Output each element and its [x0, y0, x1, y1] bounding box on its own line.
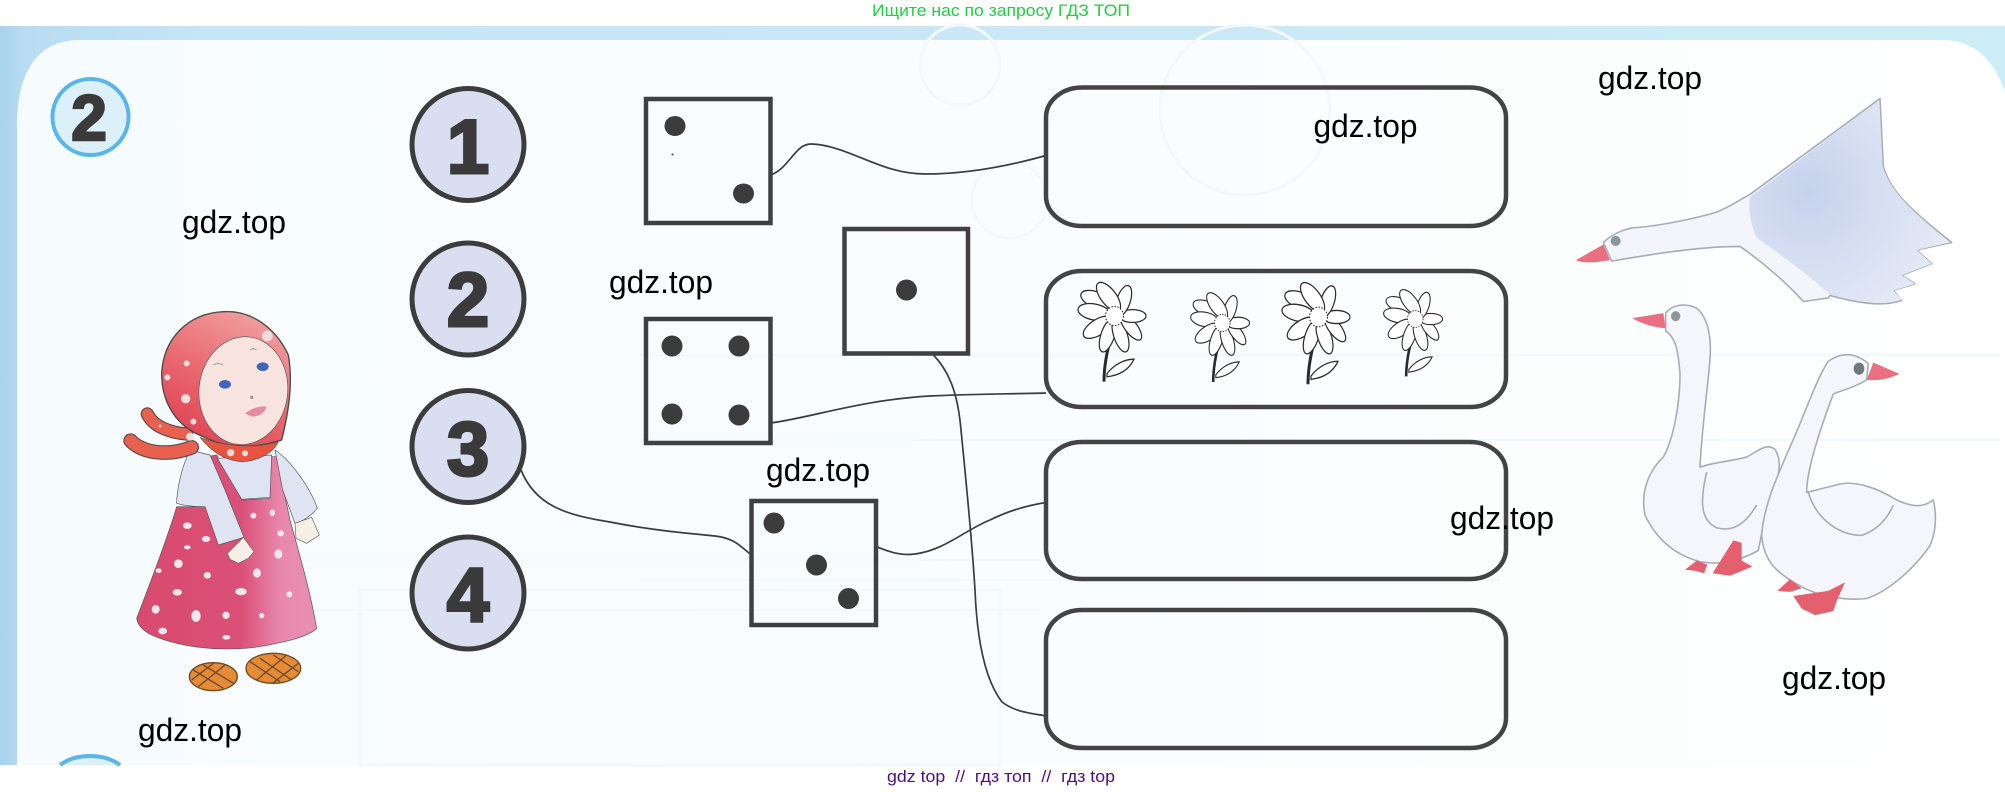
number circle 4: 4 — [447, 553, 489, 638]
number circle 2 — [412, 243, 524, 355]
number circle 1: 1 — [447, 105, 489, 190]
header link text: Ищите нас по запросу ГДЗ ТОП — [872, 1, 1130, 20]
scarf knot band — [200, 437, 278, 462]
badge: exercise number 2: 2 — [71, 82, 107, 154]
watermark text: gdz.top — [1598, 60, 1702, 96]
answer box 1 — [1046, 88, 1506, 226]
blouse and sleeves — [177, 450, 317, 545]
connector: die three to third box — [876, 502, 1046, 555]
standing goose — [1632, 305, 1779, 576]
connector: die one to fourth box — [933, 354, 1046, 716]
shoes — [189, 653, 301, 691]
scarf dots — [159, 331, 273, 456]
headscarf — [162, 312, 290, 446]
hands — [227, 517, 319, 563]
watermark text: gdz.top — [1314, 108, 1418, 144]
dress — [137, 455, 317, 649]
flower 1 — [1077, 278, 1146, 382]
connector: circle three to die three — [521, 470, 752, 555]
illustration: geese — [1576, 98, 1952, 615]
eyes, nose, mouth — [213, 349, 269, 417]
badge: next exercise, cut off — [60, 756, 120, 765]
watermark text: gdz.top — [766, 452, 870, 488]
number circle 4 — [412, 537, 524, 649]
badge: exercise number 2 — [52, 79, 128, 155]
sitting goose — [1762, 355, 1936, 615]
number circle 3: 3 — [447, 407, 489, 492]
number circle 1 — [412, 88, 524, 200]
flower 2 — [1190, 289, 1250, 382]
answer box 3 — [1046, 442, 1506, 579]
connector: die four to flower box — [770, 393, 1046, 423]
die: two dots — [646, 99, 770, 223]
die: one dot — [844, 229, 968, 354]
watermark text: gdz.top — [609, 264, 713, 300]
face — [194, 332, 293, 449]
skirt and bib dots — [152, 509, 292, 640]
number circle 2: 2 — [447, 258, 489, 343]
answer box 2 with flowers — [1046, 271, 1506, 407]
flying goose — [1576, 98, 1952, 304]
headscarf ties — [131, 414, 192, 453]
footer link text: gdz top // гдз топ // гдз top — [887, 767, 1115, 786]
die: three dots — [752, 501, 876, 625]
watermark text: gdz.top — [1782, 660, 1886, 696]
connector: die two to empty box — [770, 144, 1046, 175]
flower 4 — [1383, 286, 1443, 376]
faint show-through print — [300, 25, 2000, 765]
answer box 4 — [1046, 610, 1506, 748]
flower 3 — [1281, 278, 1350, 384]
illustration: girl in red headscarf — [131, 312, 319, 691]
die: four dots — [646, 319, 770, 443]
watermark text: gdz.top — [182, 204, 286, 240]
legs — [189, 647, 268, 665]
watermark text: gdz.top — [138, 712, 242, 748]
watermark text: gdz.top — [1450, 500, 1554, 536]
number circle 3 — [412, 390, 524, 502]
